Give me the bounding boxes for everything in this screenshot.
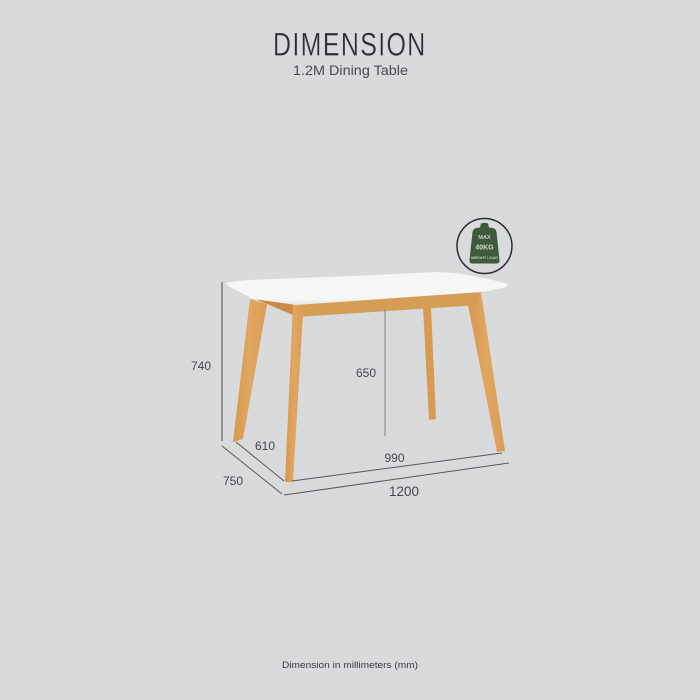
- inner depth line: [236, 442, 284, 481]
- front left leg: [285, 304, 304, 482]
- back left leg: [233, 299, 267, 442]
- outer depth line: [222, 446, 282, 494]
- under-table height line: [384, 309, 386, 436]
- inner width line: [292, 453, 502, 481]
- badge text: max: MAX: [478, 235, 491, 241]
- side apron: [253, 298, 294, 315]
- label: 650: 650: [356, 366, 376, 380]
- outer width line: [284, 463, 509, 495]
- badge text: weight load: WEIGHT LOAD: [471, 256, 498, 260]
- table top: [225, 272, 508, 305]
- back right leg: [423, 307, 436, 420]
- icon: weight load badge: [457, 218, 512, 274]
- label: 990: 990: [384, 451, 405, 465]
- front apron: [292, 292, 481, 317]
- label: 750: 750: [223, 474, 243, 488]
- table illustration: [225, 272, 508, 482]
- footnote: Dimension in millimeters (mm): [282, 660, 418, 671]
- front right leg: [468, 292, 505, 452]
- height dimension line: [221, 282, 223, 441]
- label: 1200: 1200: [389, 484, 419, 499]
- subtitle: 1.2M Dining Table: [293, 63, 408, 78]
- title: DIMENSION: [273, 28, 427, 63]
- icon: kettlebell weight: [469, 223, 500, 264]
- label: 740: 740: [191, 359, 211, 373]
- badge text: 40kg: 40KG: [475, 244, 494, 252]
- label: 610: 610: [255, 439, 275, 453]
